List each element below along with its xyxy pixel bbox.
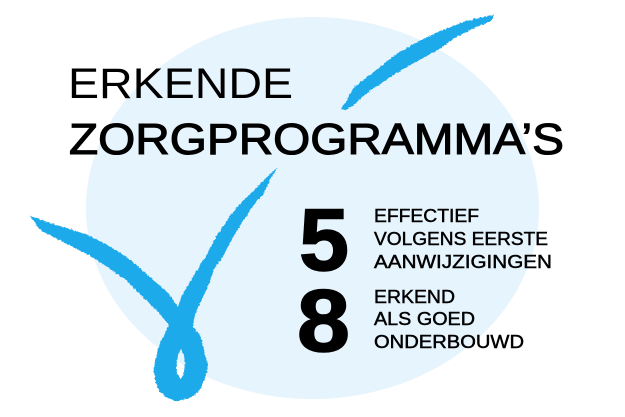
statistic: 8 erkend — [297, 271, 524, 370]
label: erkend als goed onderbouwd — [374, 287, 524, 352]
title line: Erkende: ERKENDE — [68, 60, 293, 108]
label: erkend als goed onderbouwd: ONDERBOUWD — [374, 332, 524, 352]
statistic: 5 effectief — [299, 190, 552, 289]
number 8: 8 — [297, 271, 350, 370]
label: effectief volgens eerste aanwijzigingen: AANWIJZIGINGEN — [374, 252, 552, 272]
label: erkend als goed onderbouwd: ALS GOED — [374, 309, 475, 329]
icon: check mark lower stroke with loop — [30, 167, 278, 401]
label: effectief volgens eerste aanwijzigingen — [374, 206, 552, 272]
title — [68, 60, 564, 164]
label: effectief volgens eerste aanwijzigingen: VOLGENS EERSTE — [374, 229, 548, 249]
icon: check mark short upper stroke — [341, 15, 494, 110]
background circle — [86, 17, 539, 399]
title line: Zorgprogramma's: ZORGPROGRAMMA’S — [69, 115, 564, 164]
label: effectief volgens eerste aanwijzigingen: EFFECTIEF — [374, 206, 479, 226]
number 5: 5 — [299, 190, 349, 289]
label: erkend als goed onderbouwd: ERKEND — [374, 287, 455, 307]
